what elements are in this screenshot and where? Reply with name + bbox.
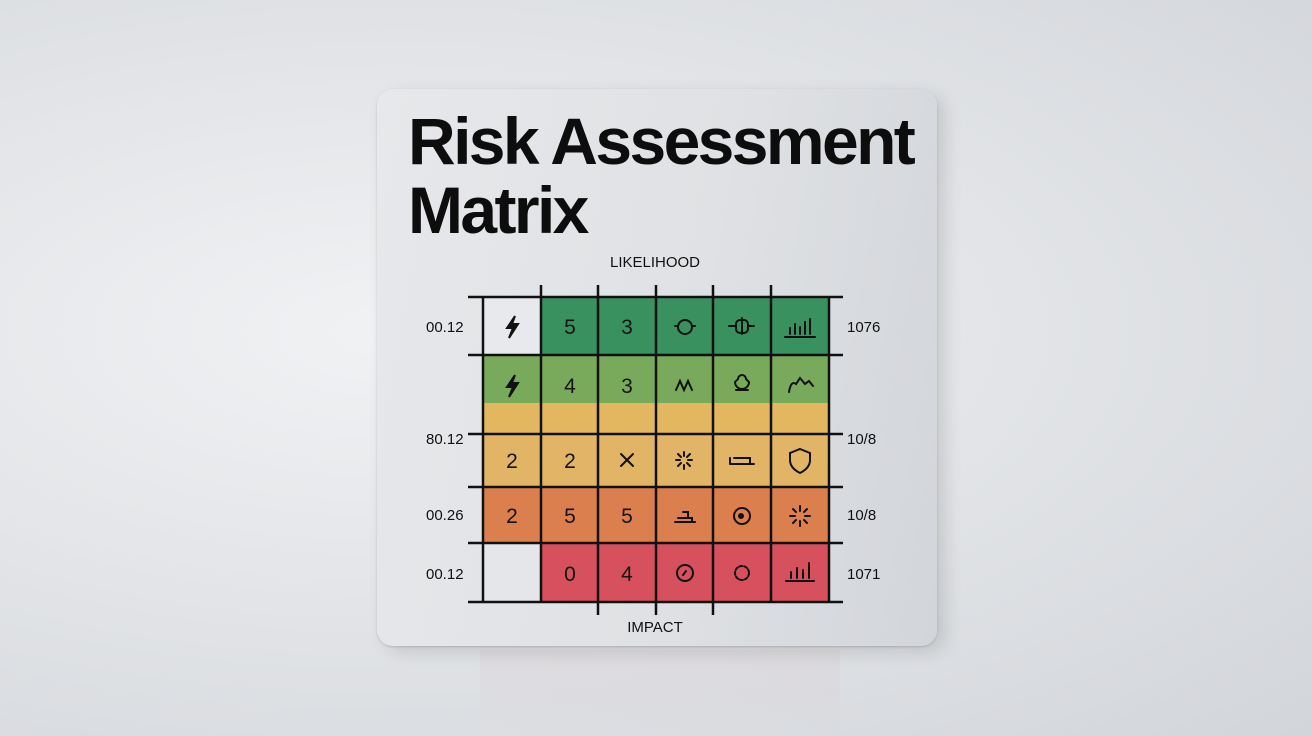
cell numbers: 0 — [564, 563, 576, 586]
cell numbers: 5 — [621, 505, 633, 528]
axis labels: 1076 — [847, 319, 880, 336]
cells — [483, 297, 829, 602]
axis labels: 00.12 — [426, 319, 464, 336]
cell numbers: 2 — [564, 450, 576, 473]
axis labels: 10/8 — [847, 507, 876, 524]
reflection — [480, 650, 840, 736]
cell numbers: 2 — [506, 505, 518, 528]
axis labels: 1071 — [847, 566, 880, 583]
cell numbers — [506, 316, 633, 586]
title: Risk Assessment — [408, 104, 913, 178]
axis labels: 10/8 — [847, 431, 876, 448]
title — [408, 104, 915, 247]
icons — [507, 316, 815, 581]
title: Matrix — [408, 173, 587, 247]
cell numbers: 3 — [621, 375, 633, 398]
cell numbers: 3 — [621, 316, 633, 339]
axis labels: LIKELIHOOD — [610, 254, 700, 271]
cell numbers: 4 — [621, 563, 633, 586]
axis labels: 80.12 — [426, 431, 464, 448]
cell numbers: 4 — [564, 375, 576, 398]
card panel — [377, 89, 937, 646]
cell numbers: 5 — [564, 316, 576, 339]
axis labels: IMPACT — [627, 619, 683, 636]
axis labels: 00.12 — [426, 566, 464, 583]
cell numbers: 5 — [564, 505, 576, 528]
axis labels: 00.26 — [426, 507, 464, 524]
axis labels — [426, 254, 880, 636]
cell numbers: 2 — [506, 450, 518, 473]
